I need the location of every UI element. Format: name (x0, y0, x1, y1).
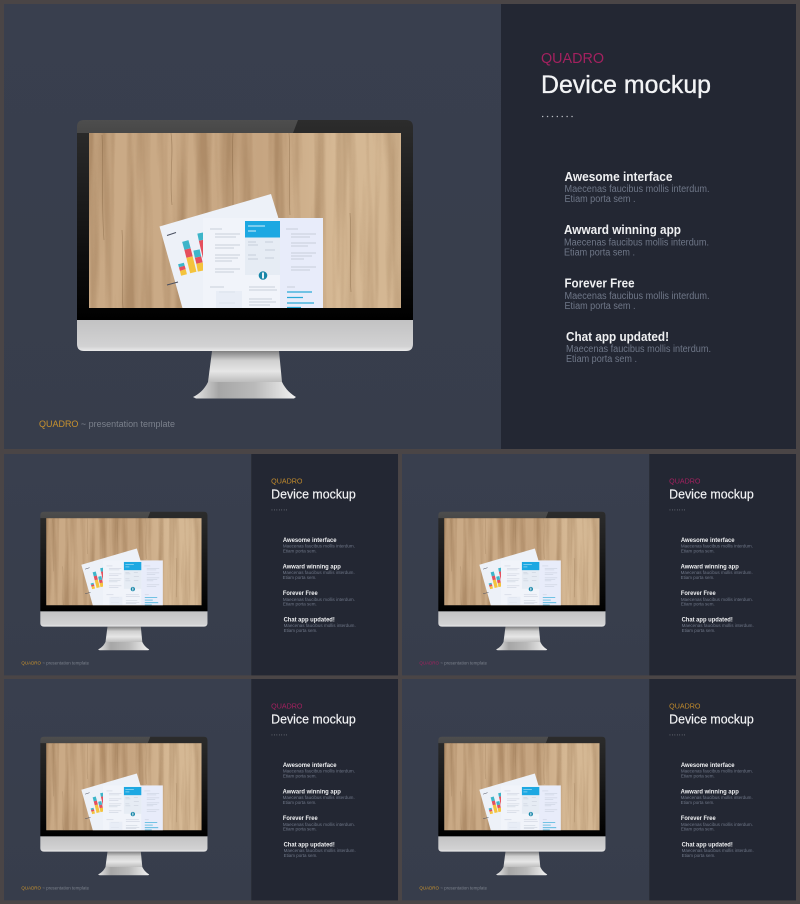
monitor, slide 5 (438, 737, 605, 875)
text content, slide 4: Maecenas faucibus mollis interdum. (283, 769, 355, 775)
text content, slide 3 (419, 476, 754, 666)
monitor stand foot (193, 382, 296, 398)
text content, slide 3: QUADRO ~ presentation template (419, 660, 487, 666)
feature 1: Etiam porta sem . (564, 194, 636, 205)
panel: right text panel (501, 4, 796, 449)
text content, slide 5: Etiam porta sem. (682, 853, 715, 859)
text content, slide 2: Maecenas faucibus mollis interdum. (283, 570, 355, 576)
text content, slide 5: Etiam porta sem. (681, 774, 715, 780)
text content, slide 5: Forever Free (681, 815, 716, 822)
text content, slide 5: Awward winning app (681, 788, 739, 795)
text content, slide 3: Etiam porta sem. (682, 628, 715, 634)
feature 3: Maecenas faucibus mollis interdum. (564, 291, 710, 302)
text content, slide 5: QUADRO (669, 701, 701, 710)
text content, slide 3: Etiam porta sem. (681, 575, 714, 581)
monitor stand neck (208, 351, 282, 382)
text content, slide 5: QUADRO ~ presentation template (419, 885, 487, 891)
blue header block (245, 221, 280, 238)
text content, slide 4: Etiam porta sem. (283, 827, 317, 833)
text content, slide 2: Awward winning app (283, 563, 341, 570)
slide 1: large preview (4, 4, 796, 449)
feature 4: Maecenas faucibus mollis interdum. (566, 344, 711, 355)
monitor bezel (77, 120, 413, 320)
feature 2: Etiam porta sem . (564, 248, 635, 258)
feature 1 (564, 169, 710, 205)
text content, slide 2: Chat app updated! (284, 617, 335, 624)
slide 3: magenta variant (402, 454, 796, 675)
round badge (259, 271, 267, 280)
text content, slide 4: Maecenas faucibus mollis interdum. (284, 848, 356, 854)
monitor mockup (77, 120, 413, 398)
text content, slide 3: Awward winning app (681, 563, 739, 570)
slide 2: orange variant (4, 454, 398, 675)
text content, slide 4 (21, 701, 356, 891)
feature 2 (564, 222, 709, 258)
text content, slide 2 (21, 476, 356, 666)
feature 2: Awward winning app (564, 222, 681, 237)
text content, slide 3: Maecenas faucibus mollis interdum. (681, 597, 753, 603)
text content, slide 5: Maecenas faucibus mollis interdum. (682, 848, 754, 854)
text content, slide 5: Awesome interface (681, 762, 735, 769)
text content, slide 5: Device mockup (669, 712, 754, 726)
panel: text panel, slide 5 (649, 679, 796, 900)
feature 2: Maecenas faucibus mollis interdum. (564, 238, 709, 248)
feature 3: Forever Free (564, 276, 634, 290)
text content, slide 4: Maecenas faucibus mollis interdum. (283, 822, 355, 828)
monitor, slide 3 (438, 512, 605, 650)
text content, slide 4: Etiam porta sem. (283, 774, 317, 780)
text content, slide 2: Awesome interface (283, 537, 337, 544)
monitor chin (77, 320, 413, 351)
text content, slide 4: Awward winning app (283, 788, 341, 795)
text content, slide 2: QUADRO ~ presentation template (21, 660, 89, 666)
text content, slide 3: Device mockup (669, 487, 754, 501)
slide 5: orange variant (402, 679, 796, 900)
text content, slide 2: Etiam porta sem. (283, 549, 317, 555)
text content, slide 3: Maecenas faucibus mollis interdum. (681, 544, 753, 550)
text content, slide 5: Maecenas faucibus mollis interdum. (681, 769, 753, 775)
text content, slide 3: Awesome interface (681, 537, 735, 544)
monitor, slide 4 (40, 737, 207, 875)
text content, slide 2: Device mockup (271, 487, 356, 501)
text content, slide 5: Etiam porta sem. (681, 800, 714, 806)
back sheet with bar chart (160, 194, 285, 310)
text content, slide 3: QUADRO (669, 476, 701, 485)
text content, slide 4: Forever Free (283, 815, 318, 822)
feature 4: Etiam porta sem . (566, 354, 637, 365)
slide background (4, 4, 501, 449)
text content, slide 5: Maecenas faucibus mollis interdum. (681, 822, 753, 828)
text content, slide 4: Chat app updated! (284, 842, 335, 849)
feature 3 (564, 276, 710, 312)
text content, slide 2: Maecenas faucibus mollis interdum. (283, 597, 355, 603)
text content, slide 2: Etiam porta sem. (284, 628, 317, 634)
dotted rule (542, 116, 573, 118)
title: Device mockup (541, 71, 711, 99)
panel: text panel, slide 2 (251, 454, 398, 675)
text content, slide 4: QUADRO ~ presentation template (21, 885, 89, 891)
text content, slide 2: Maecenas faucibus mollis interdum. (284, 623, 356, 629)
footer caption: QUADRO ~ presentation template (39, 419, 175, 430)
monitor, slide 2 (40, 512, 207, 650)
text content, slide 4: Etiam porta sem. (284, 853, 317, 859)
text content, slide 3: Maecenas faucibus mollis interdum. (681, 570, 753, 576)
text content, slide 2: Maecenas faucibus mollis interdum. (283, 544, 355, 550)
feature list (564, 169, 711, 365)
text content, slide 3: Chat app updated! (682, 617, 733, 624)
bezel glare (77, 120, 298, 133)
column text lines (210, 229, 316, 305)
feature 1: Maecenas faucibus mollis interdum. (564, 184, 710, 195)
text content, slide 4: Device mockup (271, 712, 356, 726)
text content, slide 2: Forever Free (283, 590, 318, 597)
text content, slide 4: Awesome interface (283, 762, 337, 769)
text content, slide 5: Chat app updated! (682, 842, 733, 849)
panel: text panel, slide 3 (649, 454, 796, 675)
text content, slide 2: Etiam porta sem. (283, 575, 316, 581)
heading block (541, 50, 711, 116)
text content, slide 5 (419, 701, 754, 891)
text content, slide 4: Maecenas faucibus mollis interdum. (283, 795, 355, 801)
slide 4: magenta heading variant (4, 679, 398, 900)
screen wallpaper: wood (89, 133, 401, 308)
text content, slide 5: Etiam porta sem. (681, 827, 715, 833)
text content, slide 5: Maecenas faucibus mollis interdum. (681, 795, 753, 801)
text content, slide 2: QUADRO (271, 476, 303, 485)
text content, slide 3: Maecenas faucibus mollis interdum. (682, 623, 754, 629)
text content, slide 3: Etiam porta sem. (681, 602, 715, 608)
feature 1: Awesome interface (564, 169, 672, 184)
feature 3: Etiam porta sem . (564, 301, 636, 312)
text content, slide 3: Etiam porta sem. (681, 549, 715, 555)
text content, slide 2: Etiam porta sem. (283, 602, 317, 608)
paper documents on screen (160, 194, 323, 310)
cyan bars (287, 292, 314, 308)
brand label: QUADRO (541, 50, 604, 67)
feature 4: Chat app updated! (566, 329, 669, 344)
text content, slide 4: QUADRO (271, 701, 303, 710)
text content, slide 4: Etiam porta sem. (283, 800, 316, 806)
text content, slide 3: Forever Free (681, 590, 716, 597)
front sheet (203, 218, 323, 310)
panel: text panel, slide 4 (251, 679, 398, 900)
feature 4 (566, 329, 711, 365)
